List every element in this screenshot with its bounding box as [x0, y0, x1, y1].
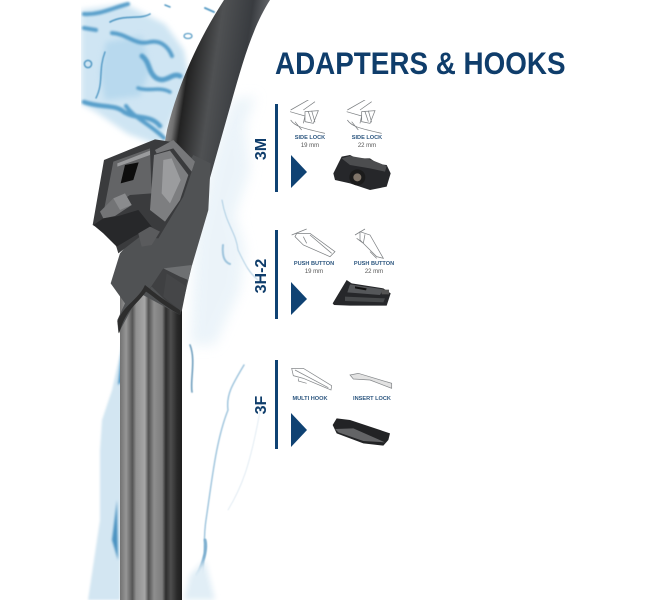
clip latch [100, 193, 132, 218]
adapter photo 3F [332, 418, 390, 446]
section: 3F [253, 360, 392, 449]
diagrams: side lock 19 mm and 22 mm [290, 100, 382, 134]
clip front [93, 139, 195, 253]
adapter photo 3H-2 [332, 280, 391, 306]
water splash [81, 4, 262, 600]
label: insert lock: INSERT LOCK [353, 396, 391, 402]
splash: left water beside lower blade [88, 345, 122, 600]
section: 3M [253, 100, 391, 192]
diagrams: multi hook and insert lock [291, 368, 392, 390]
label: multi hook: MULTI HOOK [292, 396, 328, 402]
label: side lock 22 mm [352, 135, 382, 148]
label: push button 22 mm [354, 261, 394, 274]
label: push button 22 mm: 22 mm [365, 268, 383, 274]
wiper connector [93, 139, 211, 333]
blade upper section [160, 0, 270, 185]
splash: top water [81, 4, 214, 146]
section: 3H-2 [253, 228, 394, 319]
label: side lock 22 mm: 22 mm [358, 142, 376, 148]
rear housing [111, 155, 211, 333]
section rule and arrow [275, 104, 307, 192]
label: push button 19 mm: 19 mm [305, 268, 323, 274]
clip side ribs [150, 151, 188, 222]
section label 3M: 3M [253, 138, 270, 160]
clip window [121, 162, 139, 183]
section label 3H-2: 3H-2 [253, 259, 270, 293]
section rule and arrow [275, 230, 307, 319]
splash: right water behind blade [190, 96, 256, 345]
label: side lock 19 mm: 19 mm [301, 142, 319, 148]
label: push button 19 mm [294, 261, 334, 274]
product photo: wiper blade with water splash [81, 0, 270, 600]
label: push button 19 mm: PUSH BUTTON [294, 261, 334, 267]
label: side lock 19 mm [295, 135, 325, 148]
label: side lock 19 mm: SIDE LOCK [295, 135, 325, 141]
section label 3F: 3F [253, 396, 270, 414]
diagrams: push button 19 mm and 22 mm [292, 228, 384, 259]
label: side lock 22 mm: SIDE LOCK [352, 135, 382, 141]
adapter photo 3M [333, 155, 391, 190]
section rule and arrow [275, 360, 307, 449]
label: push button 22 mm: PUSH BUTTON [354, 261, 394, 267]
title: ADAPTERS & HOOKS [275, 45, 566, 81]
blade lower section [120, 290, 182, 600]
